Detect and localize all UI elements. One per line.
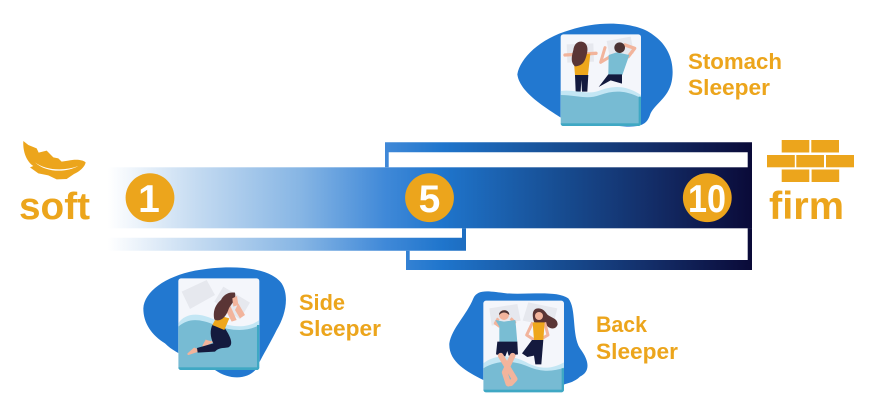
label: stomach sleeper: Stomach [688,49,782,74]
illustration: stomach sleeper [517,24,673,127]
icon: bricks [767,140,854,182]
marker: 1 [126,173,174,222]
label: back sleeper: Back [596,312,648,337]
label: back sleeper: Sleeper [596,339,678,364]
side sleeper range bracket [108,228,466,251]
stomach sleeper range bracket [385,142,752,228]
label: soft: soft [19,186,90,228]
label: side sleeper: Sleeper [299,316,381,341]
icon: feather [23,141,86,179]
firmness scale bar [108,142,752,270]
illustration: side sleeper [143,267,286,377]
illustration: back sleeper [449,291,587,392]
marker: 10: 10 [688,178,726,221]
label: firm: firm [769,185,844,228]
label: stomach sleeper: Sleeper [688,75,770,100]
marker: 1: 1 [138,178,160,221]
label: back sleeper [596,312,678,364]
label: side sleeper [299,290,381,341]
back sleeper range bracket [406,228,752,270]
label: side sleeper: Side [299,290,345,315]
marker: 5: 5 [419,178,440,221]
label: stomach sleeper [688,49,782,100]
marker: 5 [405,173,454,222]
main gradient bar [108,167,752,228]
